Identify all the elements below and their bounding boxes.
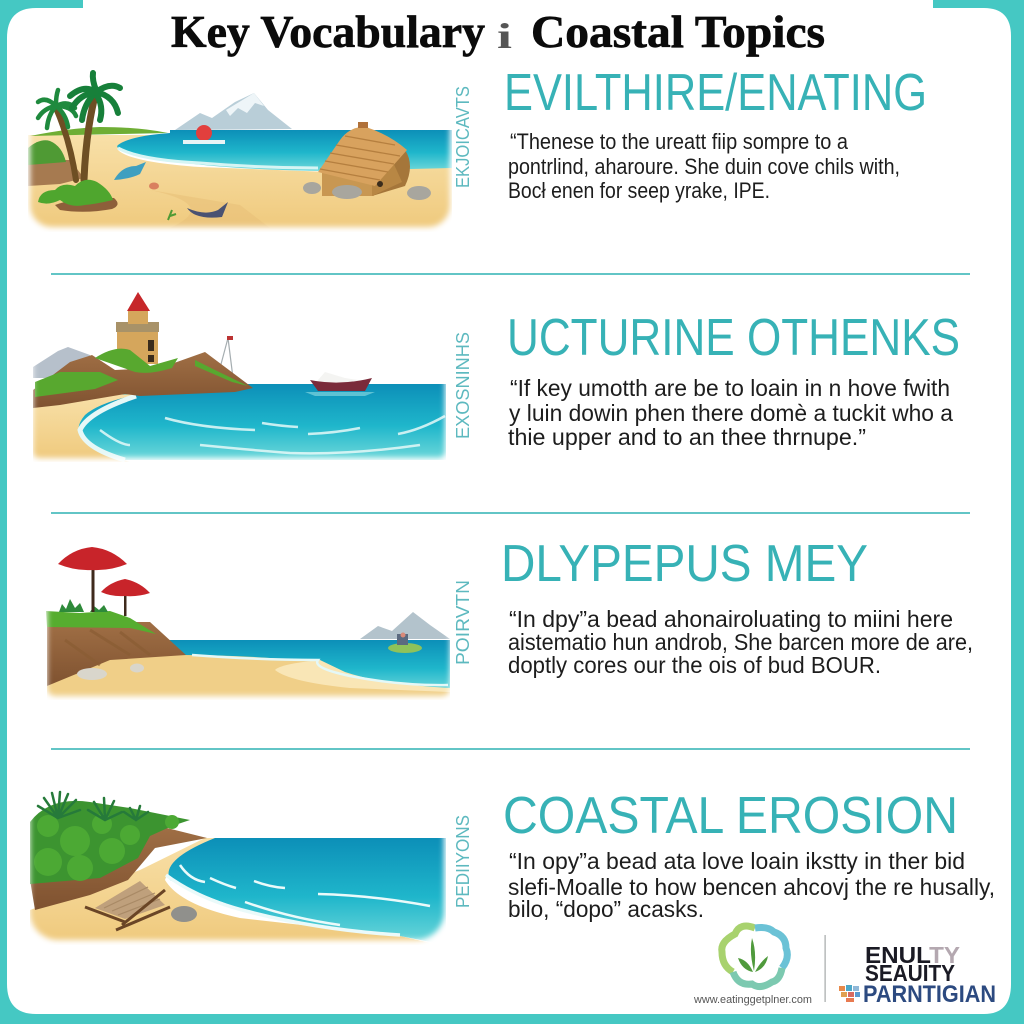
jungle mass — [30, 801, 190, 884]
wave foam — [118, 148, 318, 168]
foliage clumps — [34, 814, 179, 881]
body text row 2: “If key umotth are be to loain in n hove fwith — [510, 375, 950, 401]
divider row 1 — [51, 273, 970, 275]
palm fronds left — [38, 90, 76, 128]
grass — [46, 611, 156, 634]
white rocks — [77, 664, 144, 680]
sand — [30, 838, 440, 945]
mast with flag — [220, 336, 233, 373]
sand beach — [28, 135, 452, 232]
body text row 1: “Thenese to the ureatt fiip sompre to a — [510, 129, 849, 154]
sand — [47, 655, 450, 700]
eroded cliff — [47, 622, 186, 686]
body text row 1 — [508, 129, 900, 203]
far mountain — [33, 347, 90, 378]
sea — [168, 838, 446, 945]
ship — [305, 372, 375, 396]
green vegetation — [35, 349, 248, 397]
wet sand — [275, 660, 450, 692]
body text row 3: aistematio hun androb, She barcen more de are, — [508, 629, 973, 655]
body text row 2: thie upper and to an thee thrnupe.” — [508, 424, 866, 450]
vertical label row 1: EKJOICAVTS — [453, 86, 473, 188]
footer brand logo: SEAUITY — [865, 960, 955, 986]
footer separator — [824, 935, 826, 1002]
distant green shore — [30, 127, 168, 136]
surf lines — [166, 865, 430, 935]
body text row 4: slefi-Moalle to how bencen ahcovj the re husally, — [508, 874, 995, 900]
rocks by hut — [303, 182, 431, 200]
island bush — [38, 180, 118, 212]
distant mountains — [175, 93, 292, 130]
body text row 4: “In opy”a bead ata love loain ikstty in ther bid — [509, 848, 965, 874]
small plant — [168, 210, 176, 220]
panel: row 3 illustration, cliff with umbrellas — [46, 547, 450, 700]
lighthouse tower — [116, 292, 159, 364]
sea — [170, 640, 450, 688]
panel: row 4 illustration, eroding shore — [30, 792, 446, 945]
footer brand logo: ENULTY — [865, 942, 960, 968]
red boat — [183, 125, 225, 144]
panel: row 2 illustration, lighthouse headland — [33, 292, 446, 462]
big umbrella — [58, 547, 127, 612]
grass tufts — [59, 599, 108, 612]
body text row 1: Bocł enen for seep yrake, IPE. — [508, 178, 770, 203]
body text row 1: pontrlind, aharoure. She duin cove chils with, — [508, 154, 900, 179]
surf lines — [100, 416, 445, 453]
body text row 2: y luin dowin phen there domè a tuckit who a — [509, 400, 953, 426]
body text row 4 — [508, 848, 995, 922]
footer logo: flower emblem — [722, 926, 787, 987]
palm trunks — [56, 92, 96, 180]
title: Coastal Topics — [531, 7, 825, 57]
sand — [33, 394, 140, 462]
sea — [70, 384, 446, 460]
vertical label row 3: POIRVTN — [453, 580, 473, 665]
title — [171, 7, 825, 57]
heading row 3: DLYPEPUS MEY — [501, 535, 868, 593]
sea — [117, 130, 452, 171]
dark canoe — [187, 202, 228, 218]
palm fronds right — [70, 73, 120, 120]
jet ski — [388, 632, 422, 653]
surf foam — [192, 655, 448, 685]
small umbrella — [101, 579, 150, 616]
rock — [171, 906, 197, 922]
title: i — [497, 16, 512, 56]
divider row 2 — [51, 512, 970, 514]
body text row 4: bilo, “dopo” acasks. — [508, 896, 704, 922]
left cliff — [28, 160, 84, 186]
crab — [149, 182, 159, 190]
shore foam — [80, 396, 136, 460]
footer brand logo — [839, 942, 996, 1008]
distant mountain — [360, 612, 450, 639]
panel: row 1 illustration, beach with hut — [28, 73, 452, 232]
footer brand logo: PARNTIGIAN — [863, 981, 996, 1008]
wet sand shadow — [156, 191, 246, 210]
left bush — [28, 140, 66, 165]
rocky headland — [33, 352, 253, 408]
palm tufts — [38, 792, 148, 820]
heading row 1: EVILTHIRE/ENATING — [504, 64, 927, 122]
footer website: www.eatinggetplner.com — [693, 994, 812, 1006]
body text row 3: doptly cores our the ois of bud BOUR. — [508, 652, 881, 678]
title: Key Vocabulary — [171, 7, 485, 57]
heading row 4: COASTAL EROSION — [503, 787, 958, 845]
body text row 2 — [508, 375, 953, 450]
vertical label row 2: EXOSNINHS — [453, 332, 473, 439]
deck chair — [85, 881, 170, 930]
body text row 3 — [508, 606, 973, 678]
eroded bank — [30, 825, 207, 910]
blue object on sand — [114, 162, 146, 180]
wooden hut — [318, 122, 410, 196]
body text row 3: “In dpy”a bead ahonairoluating to miini here — [509, 606, 953, 632]
divider row 3 — [51, 748, 970, 750]
vertical label row 4: PEDIIYONS — [453, 815, 473, 908]
